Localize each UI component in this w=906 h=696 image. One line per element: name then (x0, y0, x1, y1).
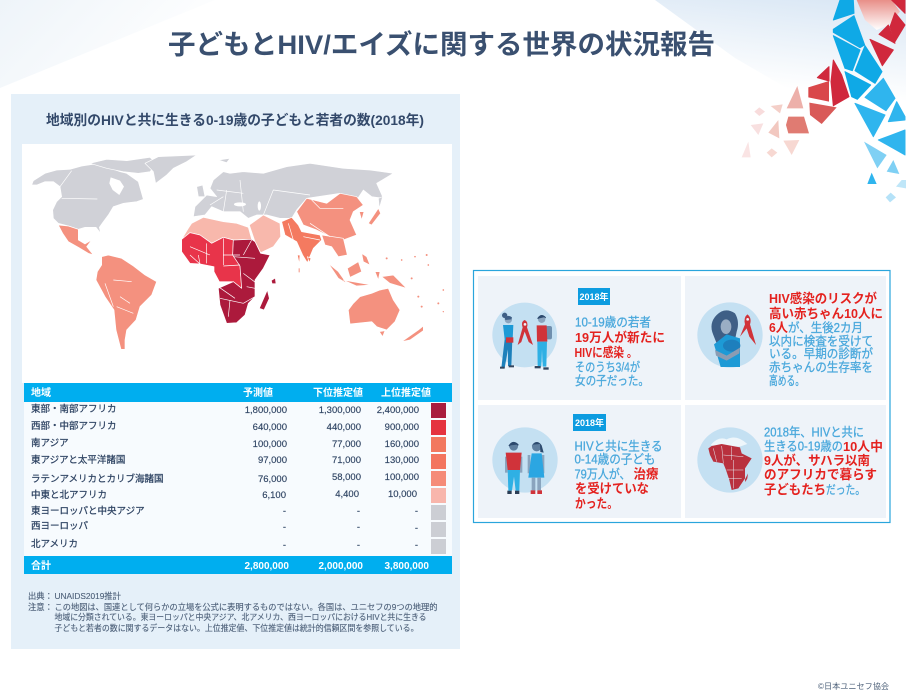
source and notes: UNAIDS2019推計 (54, 591, 122, 601)
row: North America: - (283, 540, 286, 551)
fact text: 高める。 (769, 373, 804, 388)
table header: 上位推定値 (381, 386, 431, 399)
fact text: そのうち3/4が (575, 360, 640, 374)
row: Middle East and North Africa (31, 488, 446, 503)
icon: Africa map (697, 427, 763, 493)
row: Eastern Europe and Central Asia: 東ヨーロッパと中央アジア (31, 505, 145, 517)
fact text (574, 314, 665, 388)
table (24, 383, 452, 574)
fact text: いる。早期の診断が (769, 346, 873, 361)
row: Middle East and North Africa: 10,000 (388, 489, 417, 500)
row: total: 2,800,000 (244, 561, 289, 572)
card: children without treatment (478, 405, 681, 518)
fact text: HIV感染のリスクが (769, 291, 877, 306)
fact text: 2018年、HIVと共に (764, 426, 864, 440)
row: East Asia and Pacific: 130,000 (385, 455, 419, 466)
icon: two children (492, 427, 558, 494)
fact text: 10人中 (843, 439, 883, 454)
row: western and central Africa: 640,000 (253, 422, 287, 433)
row: South Asia: 100,000 (253, 439, 287, 450)
row: eastern and southern Africa: 2,400,000 (377, 405, 419, 416)
row: total: 合計 (31, 559, 51, 572)
fact text: 女の子だった。 (575, 374, 649, 388)
row: eastern and southern Africa: 1,300,000 (319, 405, 361, 416)
source and notes: この地図は、国連として何らかの立場を公式に表明するものではない。各国は、ユニセフの9つの地理的 (54, 602, 438, 612)
table header: 地域 (31, 386, 51, 399)
fact text: 19万人が新たに (575, 330, 665, 345)
fact text: が、生後2カ月 (788, 321, 863, 335)
fact text: 子どもたち (764, 482, 826, 497)
fact text (769, 291, 883, 388)
icon: mother with baby (697, 302, 763, 368)
panel: key facts (474, 270, 890, 522)
row: eastern and southern Africa (31, 403, 446, 418)
panel heading: 地域別のHIVと共に生きる0-19歳の子どもと若者の数(2018年) (46, 112, 424, 128)
source and notes (28, 591, 438, 633)
row: North America: 北アメリカ (31, 539, 78, 550)
fact text: を受けていな (575, 481, 649, 496)
card: infant testing (685, 276, 886, 400)
row: Western Europe: - (283, 522, 286, 533)
card: sub-Saharan Africa (685, 405, 886, 518)
fact text: HIVと共に生きる (574, 440, 662, 454)
row: western and central Africa: 440,000 (327, 422, 361, 433)
icon: teens with red ribbon (492, 303, 557, 370)
table header (24, 383, 452, 402)
fact text: だった。 (826, 483, 865, 497)
fact text: 6人 (769, 320, 788, 335)
year badge (573, 414, 606, 431)
row: western and central Africa: 900,000 (385, 422, 419, 433)
row: Middle East and North Africa: 4,400 (335, 489, 359, 500)
row: Western Europe: - (357, 522, 360, 533)
row: South Asia: 南アジア (31, 437, 69, 449)
fact text: 治療 (634, 466, 659, 482)
world map (32, 155, 444, 349)
row: Eastern Europe and Central Asia: - (283, 506, 286, 517)
row: North America (31, 539, 446, 554)
row: Latin America and Caribbean: 58,000 (332, 472, 361, 483)
row: North America: - (357, 540, 360, 551)
row: Eastern Europe and Central Asia: - (415, 506, 418, 517)
row: Eastern Europe and Central Asia (31, 505, 446, 520)
row: Latin America and Caribbean: 76,000 (258, 474, 287, 485)
row: western and central Africa: 西部・中部アフリカ (31, 420, 117, 432)
fact text: 10-19歳の若者 (575, 314, 651, 330)
row: Latin America and Caribbean: ラテンアメリカとカリブ海諸国 (31, 473, 164, 485)
fact text: かった。 (575, 496, 618, 511)
year badge: 2018年 (579, 291, 609, 302)
fact text: 生きる0-19歳の (764, 440, 843, 454)
row: East Asia and Pacific: 97,000 (258, 455, 287, 466)
fact text: 赤ちゃんの生存率を (769, 360, 873, 374)
row: total: 2,000,000 (318, 561, 363, 572)
row: East Asia and Pacific (31, 454, 446, 469)
fact text (574, 440, 662, 511)
row: Western Europe: 西ヨーロッパ (31, 521, 89, 532)
row: North America: - (415, 540, 418, 551)
copyright: ©日本ユニセフ協会 (818, 681, 889, 691)
row: South Asia (31, 437, 446, 452)
row: East Asia and Pacific: 東アジアと太平洋諸国 (31, 454, 125, 466)
row: Middle East and North Africa: 6,100 (262, 490, 286, 501)
row: eastern and southern Africa: 東部・南部アフリカ (31, 403, 117, 415)
row: western and central Africa (31, 420, 446, 435)
fact text: のアフリカで暮らす (764, 467, 877, 482)
row: South Asia: 160,000 (385, 439, 419, 450)
year badge (578, 288, 610, 305)
fact text: 高い赤ちゃん10人に (769, 306, 883, 321)
source and notes: 注意： (28, 602, 53, 612)
fact text: 9人が、サハラ以南 (764, 453, 870, 468)
fact text: 以内に検査を受けて (769, 334, 873, 348)
fact text: HIVに感染 。 (574, 345, 638, 360)
row: Latin America and Caribbean: 100,000 (385, 472, 419, 483)
row: Middle East and North Africa: 中東と北アフリカ (31, 489, 107, 501)
fact text: 0-14歳の子ども (574, 452, 656, 466)
fact text: 79万人が、 (574, 468, 630, 482)
title: 子どもとHIV/エイズに関する世界の状況報告 (168, 29, 715, 60)
source and notes: 子どもと若者の数に関するデータはない。上位推定値、下位推定値は統計的信頼区間を参照している。 (54, 623, 418, 633)
row: South Asia: 77,000 (332, 439, 361, 450)
card: adolescents newly infected (478, 276, 681, 400)
row: total: 3,800,000 (384, 561, 429, 572)
year badge: 2018年 (575, 417, 604, 428)
table header: 下位推定値 (313, 386, 363, 399)
source and notes: 地域に分類されている。東ヨーロッパと中央アジア、北アメリカ、西ヨーロッパにおけるHIVと共に生きる (54, 612, 426, 622)
fact text (764, 426, 883, 497)
source and notes: 出典： (28, 591, 53, 601)
row: eastern and southern Africa: 1,800,000 (245, 405, 287, 416)
row: Latin America and Caribbean (31, 471, 446, 486)
panel: regional data (11, 94, 460, 649)
row: Western Europe (31, 521, 446, 537)
row: East Asia and Pacific: 71,000 (332, 455, 361, 466)
decorative ribbon graphic (742, 0, 906, 202)
table header: 予測値 (243, 386, 273, 399)
row: total (24, 556, 452, 574)
row: Eastern Europe and Central Asia: - (357, 506, 360, 517)
row: Western Europe: - (415, 523, 418, 534)
